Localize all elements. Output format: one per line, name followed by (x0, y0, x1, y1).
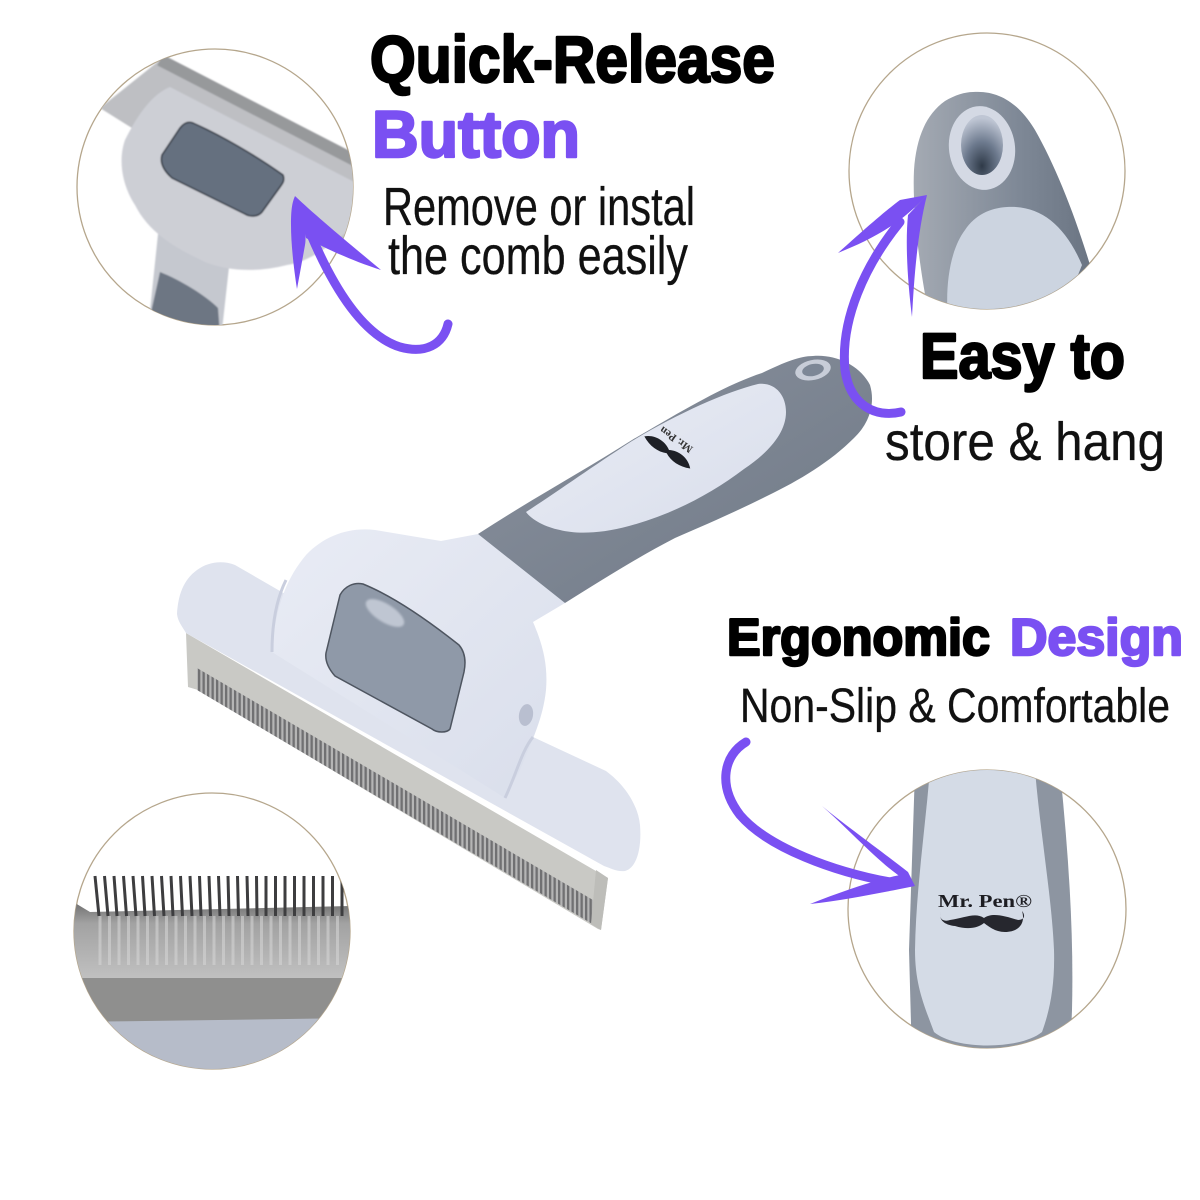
brand logo (938, 891, 1032, 932)
tip of blade (591, 870, 608, 930)
comb teeth (197, 668, 594, 925)
purple word: Design (1010, 609, 1183, 667)
body line 1: Remove or instal (383, 177, 695, 237)
title line 1: Quick-Release (370, 22, 775, 96)
handle inlay (526, 384, 786, 533)
heading: easy to: Easy to (920, 320, 1125, 392)
product: deshedding tool (177, 356, 872, 930)
zoomed grip (909, 770, 1072, 1060)
text: remove or install (383, 177, 695, 286)
wing seams (272, 580, 533, 798)
handle logo: Mr. Pen (658, 424, 695, 455)
circle outline (74, 793, 350, 1069)
panel: comb teeth detail (70, 793, 360, 1080)
arrow: to quick-release button (291, 196, 448, 349)
circle outline (849, 33, 1125, 309)
text: store and hang: store & hang (885, 412, 1165, 472)
hanging hole (793, 356, 833, 384)
panel: quick-release detail (77, 49, 360, 335)
arrow: to hanging hole (838, 195, 927, 413)
circle outline (848, 770, 1126, 1048)
zoomed button (100, 60, 360, 335)
arrow: to ergonomic grip (726, 742, 915, 904)
brand logo: Mr. Pen® (938, 891, 1032, 911)
side pin (517, 703, 535, 727)
panel: hanging hole detail (849, 33, 1125, 320)
zoomed handle end (914, 92, 1090, 320)
title line 2: Button (372, 97, 580, 171)
zoomed teeth (70, 876, 360, 1080)
heading: quick-release button (370, 22, 775, 171)
steel blade (186, 633, 608, 930)
mounting bar (177, 562, 640, 871)
panel: ergonomic grip detail (848, 770, 1126, 1060)
black word: Ergonomic (727, 609, 990, 667)
handle grip (478, 356, 872, 603)
handle logo (642, 418, 703, 472)
grey quick-release button (326, 583, 465, 732)
body line 2: the comb easily (388, 226, 688, 286)
circle outline (77, 49, 353, 325)
heading: ergonomic design (727, 609, 1183, 667)
head arch (272, 529, 565, 798)
